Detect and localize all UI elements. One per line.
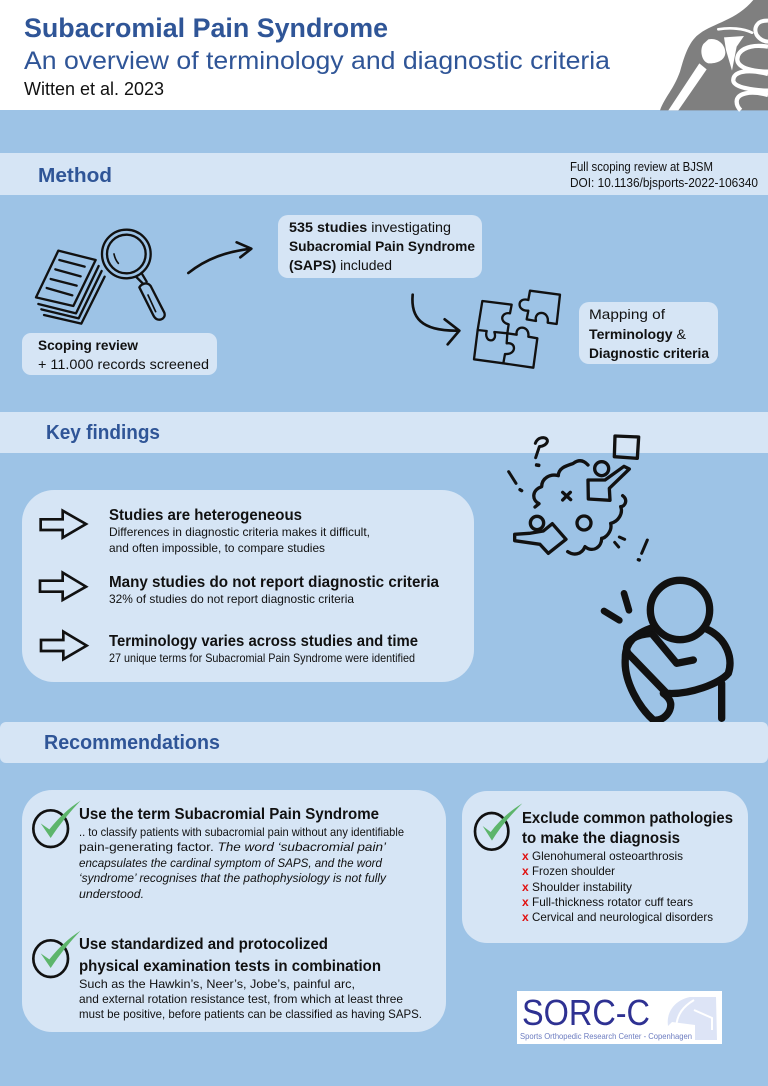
arrow: curved down-right <box>412 295 459 344</box>
recommendation 1: pain-generating factor. The word ‘subacromial pain’ <box>79 840 386 854</box>
callout: scoping review <box>22 333 217 375</box>
list: exclusions: x <box>522 880 529 894</box>
reference note <box>570 160 758 190</box>
header panel <box>0 0 768 110</box>
callout: mapping <box>579 302 718 364</box>
recommendation 2: must be positive, before patients can be classified as having SAPS. <box>79 1007 422 1021</box>
heading: recommendations: Recommendations <box>44 732 220 754</box>
arrow: finding 3 <box>41 632 87 659</box>
list: exclusions: x <box>522 910 529 924</box>
finding 3: Terminology varies across studies and time <box>109 633 418 650</box>
recommendation 2 <box>79 936 422 1021</box>
recommendation 1 <box>79 806 404 901</box>
icon: person with shoulder pain <box>604 580 730 720</box>
recommendation 2: and external rotation resistance test, from which at least three <box>79 992 403 1006</box>
list: exclusions: Full-thickness rotator cuff tears <box>532 895 693 909</box>
recommendation 1: .. to classify patients with subacromial pain without any identifiable <box>79 825 404 839</box>
finding 3 <box>109 633 418 665</box>
arrow: finding 1 <box>41 511 86 538</box>
finding 1: Differences in diagnostic criteria makes it difficult, <box>109 525 370 539</box>
logo: SORC-C: SORC-C <box>522 992 650 1033</box>
recommendation 1: Use the term Subacromial Pain Syndrome <box>79 806 379 823</box>
list: exclusions: Shoulder instability <box>532 880 632 894</box>
list: exclusions: Frozen shoulder <box>532 864 615 878</box>
subtitle: An overview of terminology and diagnostic criteria <box>24 47 610 75</box>
reference note: DOI: 10.1136/bjsports-2022-106340 <box>570 176 758 190</box>
recommendation 1: ‘syndrome’ recognises that the pathophysiology is not fully <box>79 871 387 885</box>
callout: included studies: (SAPS) included <box>289 257 392 273</box>
panel: recommendations left <box>22 790 446 1032</box>
reference note: Full scoping review at BJSM <box>570 160 713 174</box>
recommendation 2: physical examination tests in combination <box>79 958 381 975</box>
recommendation 1: understood. <box>79 887 144 901</box>
callout: scoping review: + 11.000 records screened <box>38 356 209 372</box>
finding 2 <box>109 574 439 606</box>
icon: confused thought cloud <box>509 436 647 560</box>
finding 2: 32% of studies do not report diagnostic criteria <box>109 592 354 606</box>
heading: exclude pathologies: to make the diagnosis <box>522 830 680 847</box>
icon: shoulder skeleton <box>660 0 768 110</box>
panel: key findings <box>22 490 474 682</box>
callout: included studies <box>278 215 482 278</box>
logo: SORC-C: Sports Orthopedic Research Center - Copenhagen <box>520 1031 692 1041</box>
finding 3: 27 unique terms for Subacromial Pain Syndrome were identified <box>109 651 415 665</box>
finding 1: Studies are heterogeneous <box>109 507 302 524</box>
icon: check 3 <box>475 803 522 850</box>
author citation: Witten et al. 2023 <box>24 79 164 99</box>
heading: key findings: Key findings <box>46 422 160 444</box>
logo: SORC-C <box>517 991 722 1044</box>
callout: mapping: Terminology & <box>589 326 687 342</box>
finding 2: Many studies do not report diagnostic criteria <box>109 574 439 591</box>
list: exclusions: x <box>522 849 529 863</box>
callout: mapping: Mapping of <box>589 306 665 322</box>
callout: included studies: Subacromial Pain Syndrome <box>289 238 475 254</box>
list: exclusions: x <box>522 895 529 909</box>
icon: check 1 <box>33 801 81 847</box>
icon: check 2 <box>33 931 81 977</box>
recommendation 2: Such as the Hawkin’s, Neer’s, Jobe’s, painful arc, <box>79 977 355 991</box>
arrow: finding 2 <box>40 573 86 600</box>
heading: exclude pathologies: Exclude common pathologies <box>522 810 733 827</box>
recommendation 1: encapsulates the cardinal symptom of SAPS, and the word <box>79 856 382 870</box>
list: exclusions: Cervical and neurological disorders <box>532 910 713 924</box>
key findings band <box>0 412 768 453</box>
finding 1 <box>109 507 370 555</box>
recommendation 2: Use standardized and protocolized <box>79 936 328 953</box>
list: exclusions: Glenohumeral osteoarthrosis <box>532 849 683 863</box>
icon: documents and magnifier <box>36 230 165 324</box>
heading: method: Method <box>38 165 112 187</box>
callout: mapping: Diagnostic criteria <box>589 345 709 361</box>
list: exclusions: x <box>522 864 529 878</box>
finding 1: and often impossible, to compare studies <box>109 541 325 555</box>
method band <box>0 153 768 195</box>
callout: scoping review: Scoping review <box>38 337 138 353</box>
arrow: curved right <box>188 242 251 273</box>
heading: exclude pathologies <box>522 810 733 847</box>
recommendations band <box>0 722 768 763</box>
callout: included studies: 535 studies investigating <box>289 219 451 235</box>
list: exclusions <box>522 849 713 924</box>
icon: puzzle <box>474 291 560 368</box>
panel: recommendations right <box>462 791 748 943</box>
title: Subacromial Pain Syndrome <box>24 13 388 43</box>
